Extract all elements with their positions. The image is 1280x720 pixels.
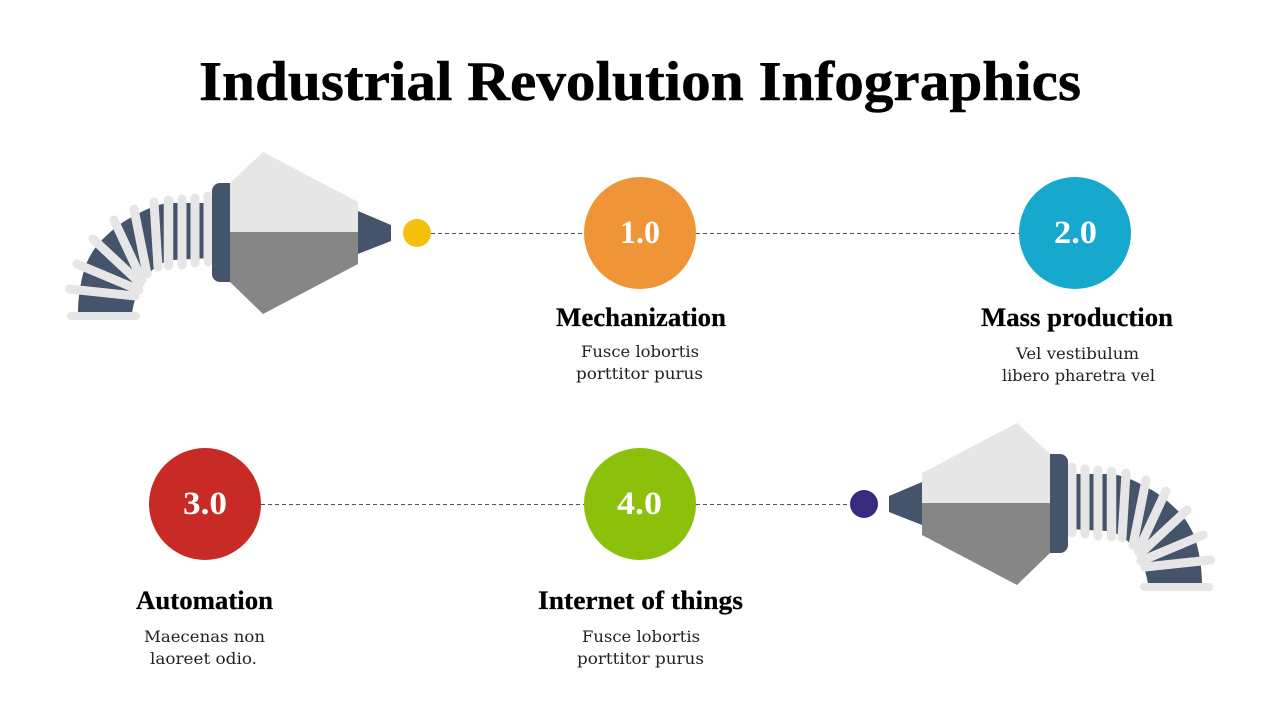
- text: automation description: Maecenas non: [144, 627, 265, 646]
- badge: 3.0: [149, 448, 261, 560]
- text: mechanization description: [576, 342, 703, 383]
- illustration: top machine: [70, 152, 391, 316]
- panel: mass production: [981, 177, 1173, 385]
- heading: automation: Automation: [136, 585, 273, 615]
- text: internet of things description: porttitor purus: [577, 649, 704, 668]
- badge: 3.0: 3.0: [183, 486, 227, 522]
- text: automation description: [144, 627, 265, 668]
- illustration: bottom machine: [889, 423, 1210, 587]
- heading: mechanization: Mechanization: [556, 302, 726, 332]
- heading: internet of things: Internet of things: [538, 585, 743, 615]
- badge: 4.0: 4.0: [617, 486, 662, 522]
- text: mechanization description: porttitor purus: [576, 364, 703, 383]
- badge: 2.0: [1019, 177, 1131, 289]
- title: Industrial Revolution Infographics: [199, 51, 1081, 113]
- badge: 1.0: 1.0: [620, 215, 660, 251]
- marker: yellow dot: [403, 219, 431, 247]
- text: mass production description: Vel vestibulum: [1015, 344, 1139, 363]
- text: automation description: laoreet odio.: [150, 649, 257, 668]
- heading: mass production: Mass production: [981, 302, 1173, 332]
- panel: internet of things: [538, 448, 743, 668]
- badge: 4.0: [584, 448, 696, 560]
- panel: mechanization: [556, 177, 726, 383]
- marker: navy dot: [850, 490, 878, 518]
- text: mass production description: libero pharetra vel: [1002, 366, 1155, 385]
- text: mechanization description: Fusce lobortis: [581, 342, 699, 361]
- text: internet of things description: Fusce lobortis: [582, 627, 700, 646]
- badge: 1.0: [584, 177, 696, 289]
- badge: 2.0: 2.0: [1054, 215, 1097, 251]
- panel: automation: [136, 448, 273, 668]
- connector: top timeline: [431, 232, 1019, 234]
- text: mass production description: [1002, 344, 1155, 385]
- text: internet of things description: [577, 627, 704, 668]
- connector: bottom timeline: [261, 504, 850, 506]
